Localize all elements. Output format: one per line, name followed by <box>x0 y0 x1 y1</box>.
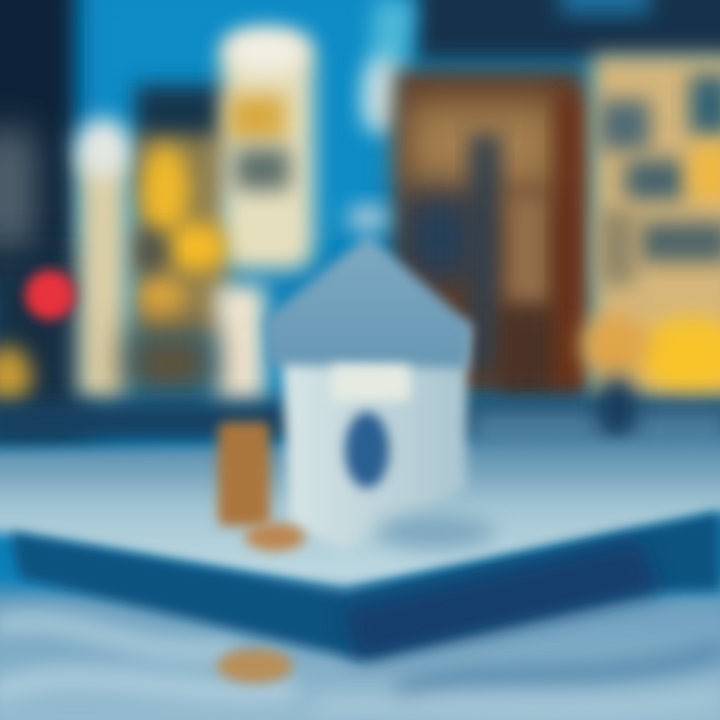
yellow light at left <box>0 346 32 410</box>
red light <box>25 270 75 320</box>
house wall <box>280 325 468 550</box>
upper window glow <box>332 365 410 401</box>
house roof <box>264 235 472 368</box>
copper cylinder <box>218 422 305 551</box>
dark tower at left edge <box>0 0 75 280</box>
pale column <box>78 150 128 405</box>
dark band at top right <box>415 0 720 60</box>
yellow glow <box>141 145 189 235</box>
grey haze at left edge <box>0 130 35 260</box>
blue glow at top right <box>560 0 650 15</box>
house shadow on platform <box>375 516 495 548</box>
dark street band <box>0 250 90 440</box>
panel: distant blue plane <box>470 410 720 465</box>
bollard <box>597 376 637 440</box>
spire above house <box>363 57 403 133</box>
house <box>264 204 472 550</box>
waves <box>0 622 720 708</box>
roof peak <box>346 204 390 232</box>
panel: platform dark edge <box>10 512 720 660</box>
coin in foreground <box>217 649 293 683</box>
building: right glowing block <box>581 55 720 405</box>
light beam in sky <box>362 0 415 130</box>
door <box>345 412 389 488</box>
panel: horizon shadow <box>0 400 720 442</box>
building: brown centre-right <box>395 70 586 395</box>
building: centre-left cream tower group <box>75 28 314 410</box>
panel: water foreground <box>0 590 720 720</box>
panel: upper background <box>0 0 720 440</box>
panel: platform top <box>0 440 720 590</box>
windows <box>228 95 286 140</box>
